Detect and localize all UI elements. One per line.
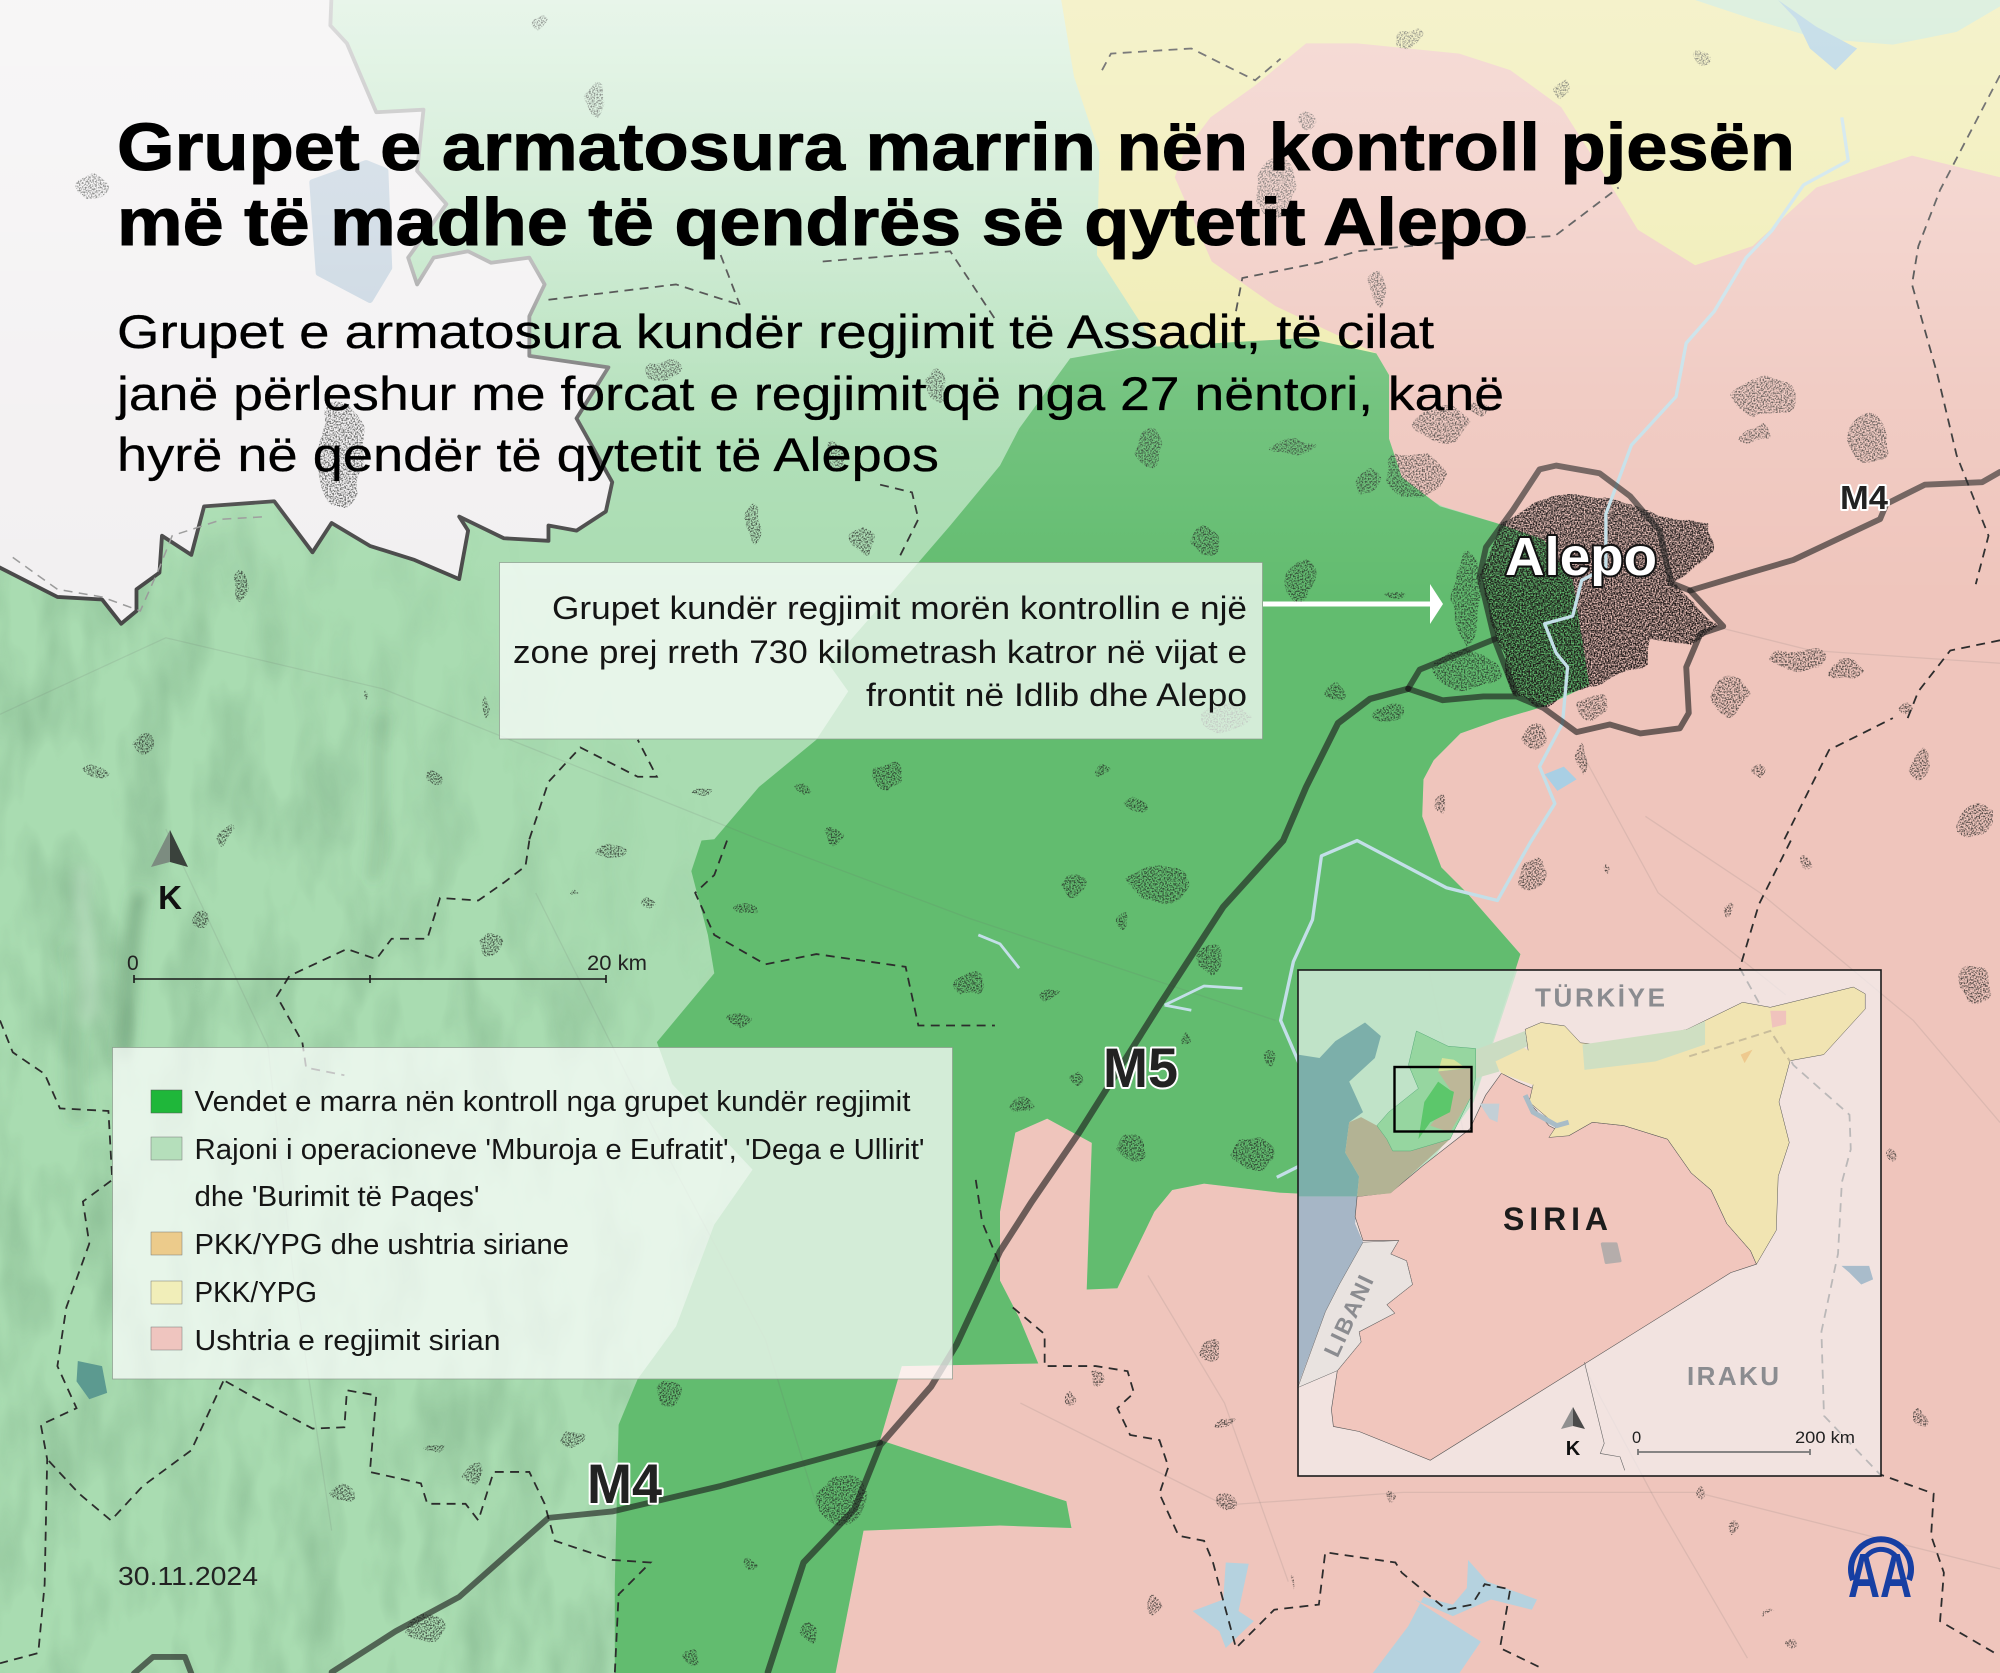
highway M5	[768, 689, 1408, 1672]
inset label: Siria: SIRIA	[1503, 1201, 1608, 1237]
inset: PKK/YPG	[1525, 987, 1865, 1264]
hillshade texture	[0, 520, 632, 1673]
scale bar	[127, 952, 647, 983]
top fade behind the title	[0, 0, 2000, 600]
inset: PKK/YPG west pocket	[1496, 1048, 1534, 1085]
faint secondary roads	[0, 612, 2000, 1658]
reservoir near Aleppo	[1545, 767, 1577, 791]
legend item: operations: dhe 'Burimit të Paqes'	[194, 1181, 480, 1213]
highway M4 east	[1690, 472, 2000, 591]
arrow: callout to Aleppo	[1263, 584, 1443, 624]
inset wash	[1298, 970, 1881, 1476]
region: PKK/YPG yellow	[1061, 0, 2000, 434]
legend item: captured: Vendet e marra nën kontroll nga grupet kundër regjimit	[194, 1086, 910, 1118]
scale bar: 0	[127, 952, 139, 975]
Aleppo ring road	[1408, 466, 1723, 733]
inset: operations area	[1377, 1031, 1476, 1151]
label: Alepo: Alepo	[1505, 527, 1657, 587]
logo: Anadolu Agency	[1848, 1539, 1912, 1611]
inset north arrow	[1561, 1407, 1585, 1460]
region: Turkey unshaded	[0, 0, 612, 624]
inset north arrow: K	[1566, 1438, 1581, 1460]
north arrow: K	[158, 879, 182, 916]
label: M4 west: M4	[587, 1452, 662, 1515]
inset: Peace Spring strip	[1582, 1021, 1705, 1070]
inset label: Libani: LIBANI	[1318, 1269, 1380, 1361]
legend item: regime army: Ushtria e regjimit sirian	[194, 1325, 501, 1357]
region: pale green north-east	[1695, 0, 2000, 45]
extra paling of the northern green	[0, 0, 2000, 446]
label: M4 east: M4	[1840, 479, 1889, 516]
inset: brown around Aleppo	[1430, 1068, 1472, 1132]
legend item: operations: Rajoni i operacioneve 'Mburoja e Eufratit', 'Dega e Ullirit'	[194, 1134, 925, 1166]
inset: sea	[1298, 1023, 1381, 1197]
inset: captured land	[1418, 1082, 1454, 1139]
callout text: Grupet kundër regjimit morën kontrollin e një	[552, 590, 1247, 626]
subtitle: janë përleshur me forcat e regjimit që nga 27 nëntori, kanë	[115, 367, 1504, 420]
inset label: Iraku: IRAKU	[1687, 1361, 1779, 1391]
subtitle: hyrë në qendër të qytetit të Alepos	[117, 428, 939, 481]
lake: Matkh east	[1372, 1560, 1537, 1673]
inset: salt flat	[1602, 1244, 1620, 1263]
legend	[112, 1048, 952, 1379]
lake: north-east	[1778, 0, 1857, 70]
ring connector	[1408, 639, 1495, 689]
callout text: frontit në Idlib dhe Alepo	[866, 677, 1247, 713]
region: regime-held pink	[835, 43, 2000, 1673]
callout text: zone prej rreth 730 kilometrash katror në vijat e	[513, 634, 1247, 670]
legend item: operations	[151, 1134, 925, 1213]
subtitle	[115, 305, 1504, 481]
logo: Anadolu Agency: AA	[1848, 1542, 1912, 1611]
legend item: PKK/YPG and army: PKK/YPG dhe ushtria siriane	[194, 1229, 569, 1261]
hillshade ridges	[70, 714, 383, 1122]
inset: green tint of the north-west	[1299, 970, 1517, 1172]
legend item: PKK/YPG: PKK/YPG	[194, 1277, 317, 1309]
title: më të madhe të qendrës së qytetit Alepo	[117, 185, 1528, 260]
road bottom-left	[134, 1657, 191, 1673]
inset: Aleppo locator box	[1394, 1067, 1472, 1132]
callout box	[500, 562, 1262, 739]
lake: Matkh west	[1193, 1562, 1254, 1648]
subtitle: Grupet e armatosura kundër regjimit të Assadit, të cilat	[117, 305, 1434, 358]
Aleppo city fabric	[0, 0, 1719, 707]
inset: Assad lake	[1525, 1095, 1569, 1126]
inset: brown west	[1345, 1117, 1450, 1197]
inset label: Türkiye: TÜRKİYE	[1535, 982, 1665, 1012]
label: M5: M5	[1103, 1036, 1178, 1099]
inset scale bar: 200 km	[1795, 1428, 1855, 1447]
inset: Jabbul lake	[1480, 1104, 1499, 1122]
inset: orange pocket	[1741, 1050, 1753, 1063]
north arrow	[151, 830, 188, 916]
highways	[134, 466, 2000, 1673]
inset: sea south	[1298, 1197, 1363, 1386]
region: land taken by anti-regime groups	[615, 338, 1589, 1673]
inset: yellow spot	[1438, 1058, 1466, 1072]
Turkey-side frontier dashes	[13, 517, 268, 611]
inset: Iraqi lake	[1841, 1266, 1873, 1284]
highway M4 west	[332, 1443, 880, 1672]
lake: Amik	[312, 163, 389, 300]
date: 30.11.2024	[118, 1561, 258, 1591]
scale bar: 20 km	[587, 952, 647, 975]
inset: pink pocket	[1770, 1011, 1786, 1028]
inset scale bar	[1632, 1428, 1855, 1455]
title	[117, 110, 1795, 260]
lake: teal reservoir	[77, 1361, 107, 1399]
title: Grupet e armatosura marrin nën kontroll pjesën	[117, 110, 1795, 185]
inset: Syria regime-held	[1331, 1073, 1756, 1460]
rivers	[978, 117, 1848, 1177]
inset scale bar: 0	[1632, 1429, 1641, 1447]
inset frame	[1298, 970, 1881, 1476]
inset: frontier and internal lines	[1584, 1362, 1625, 1470]
inset: Euphrates Shield strip	[1476, 1031, 1527, 1078]
inset map	[1298, 970, 1881, 1476]
callout text	[513, 590, 1247, 713]
inset: Lebanon	[1298, 1241, 1412, 1388]
